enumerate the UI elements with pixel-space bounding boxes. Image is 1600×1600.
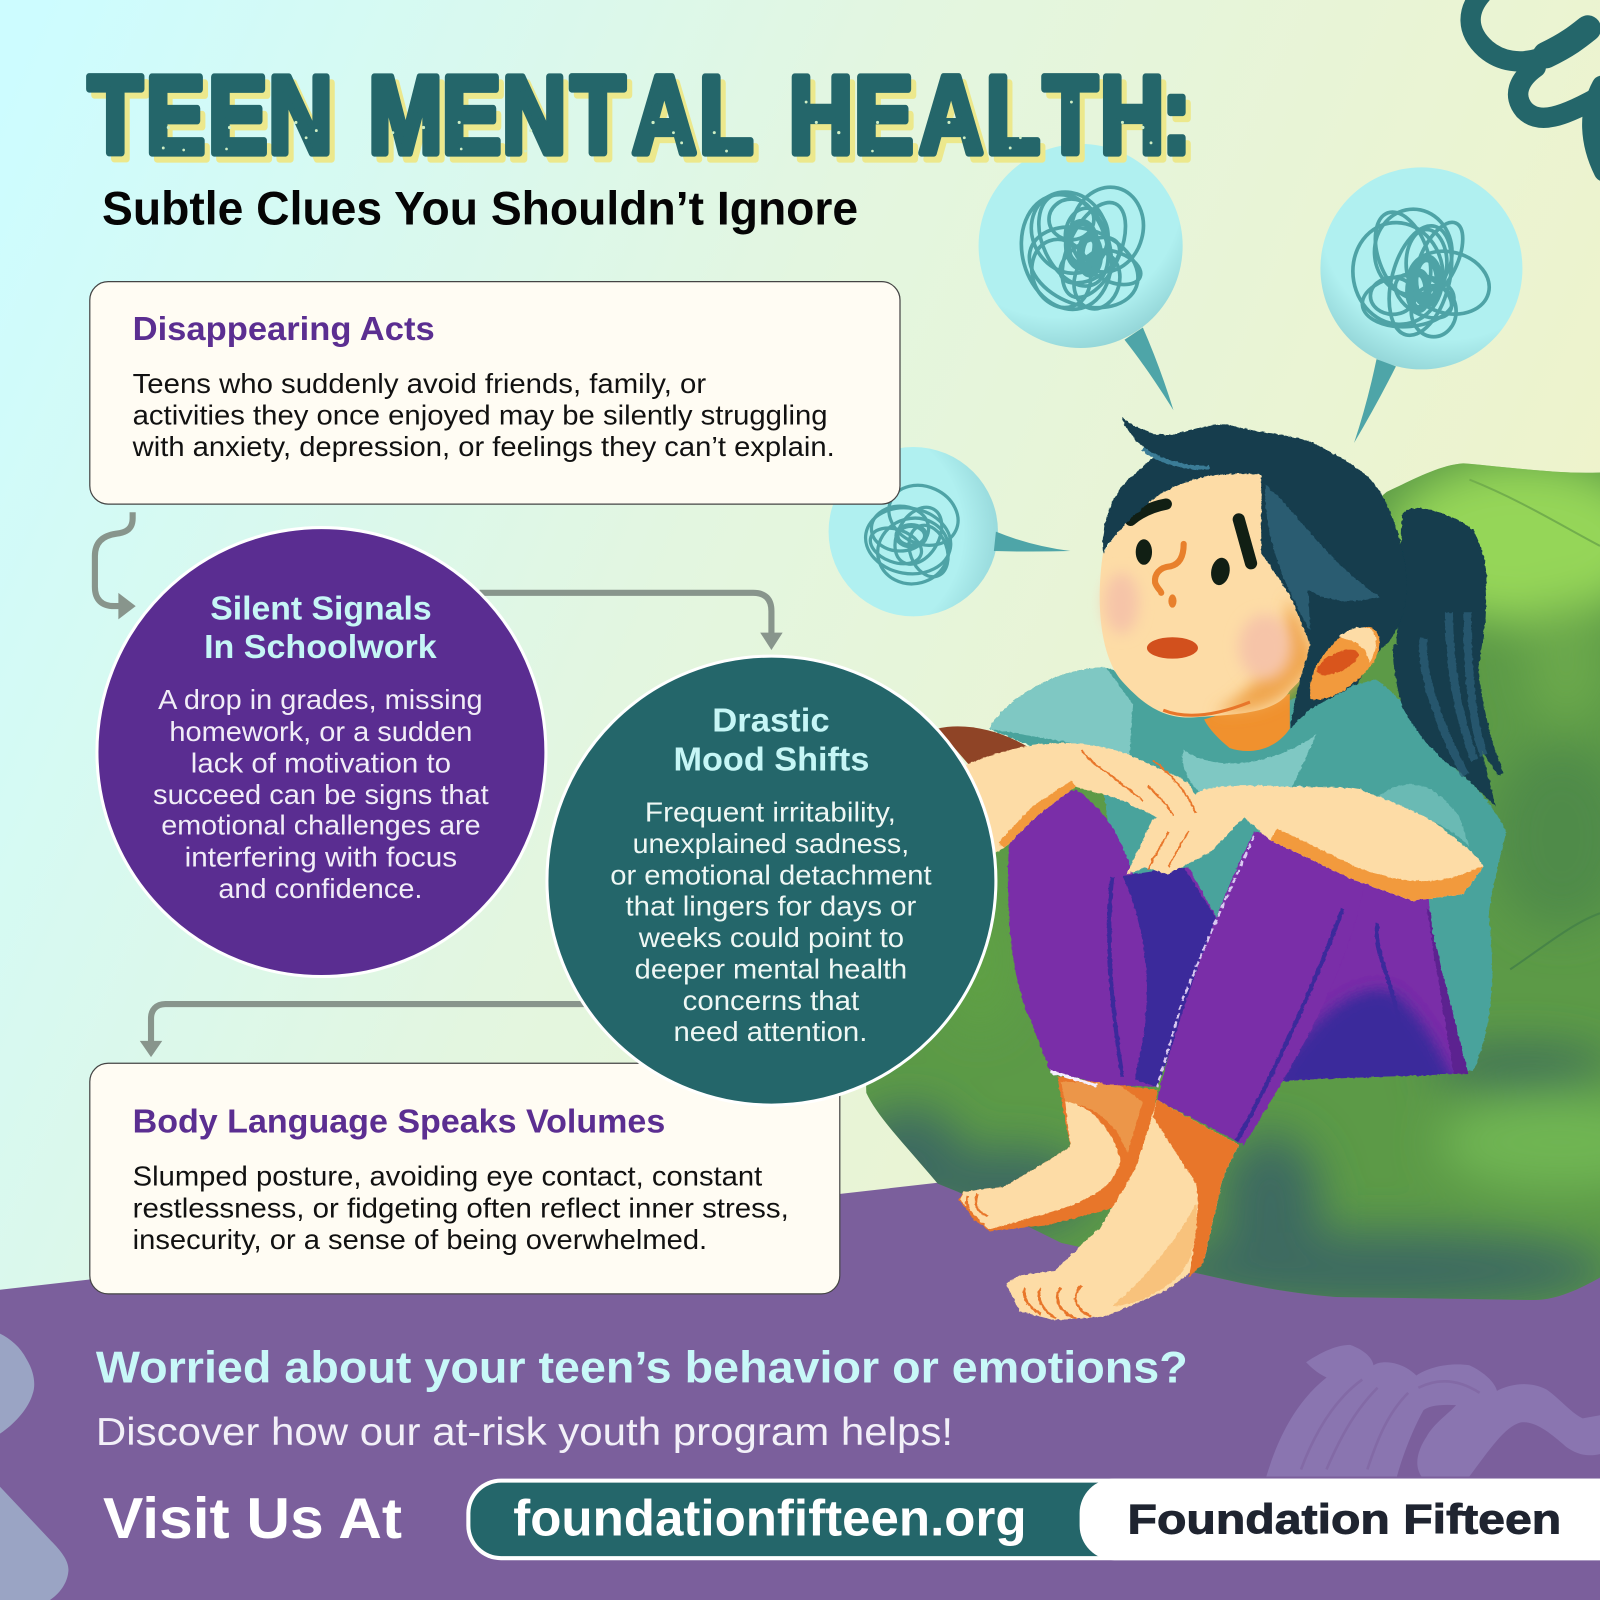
purple floor band	[0, 1107, 1600, 1600]
arms and hands	[964, 743, 1484, 901]
panel: silent signals in schoolwork: Silent Signals	[210, 590, 432, 627]
panel: silent signals in schoolwork: succeed can be signs that	[153, 779, 489, 810]
panel: body language speaks volumes: restlessness, or fidgeting often reflect inner stress,	[133, 1192, 789, 1223]
illustration: teen sitting on a bean bag	[847, 417, 1600, 1320]
title: TEEN MENTAL HEALTH:	[93, 60, 1196, 183]
brush stroke bottom left	[0, 1334, 68, 1600]
call to action heading: Worried about your teen’s behavior or emotions?	[96, 1342, 1188, 1393]
panel: drastic mood shifts: weeks could point to	[638, 922, 904, 953]
ear	[1310, 627, 1379, 700]
panel: drastic mood shifts: Mood Shifts	[673, 741, 869, 778]
panel: drastic mood shifts: Drastic	[712, 703, 830, 740]
mouth	[1147, 637, 1198, 659]
ponytail	[1393, 508, 1504, 807]
decorative squiggle top right	[1471, 0, 1600, 171]
panel: disappearing acts: activities they once enjoyed may be silently struggling	[133, 399, 828, 430]
website pill: foundationfifteen.org	[513, 1490, 1027, 1547]
bean bag	[847, 449, 1600, 1316]
panel: drastic mood shifts: deeper mental health	[635, 954, 907, 985]
brush stroke bottom right	[1266, 1345, 1600, 1477]
panel: body language speaks volumes: Slumped posture, avoiding eye contact, constant	[133, 1161, 763, 1192]
title: TEEN MENTAL HEALTH:	[88, 54, 1191, 177]
thought bubble: top left	[979, 144, 1183, 410]
panel: silent signals in schoolwork: homework, or a sudden	[169, 716, 472, 747]
panel: drastic mood shifts: need attention.	[673, 1016, 867, 1047]
panel: drastic mood shifts: concerns that	[683, 985, 860, 1016]
panel: disappearing acts: with anxiety, depression, or feelings they can’t explain.	[132, 431, 835, 462]
panel: body language speaks volumes	[90, 1063, 840, 1294]
panel: drastic mood shifts: that lingers for days or	[626, 890, 916, 921]
neck	[1204, 694, 1290, 751]
shirt	[989, 667, 1506, 1070]
panel: silent signals in schoolwork: interfering with focus	[185, 841, 457, 872]
thought bubble: top right	[1320, 167, 1522, 443]
arrow: teal circle to box four	[140, 1004, 587, 1057]
panel: drastic mood shifts: or emotional detachment	[610, 860, 932, 891]
panel: silent signals in schoolwork	[97, 528, 546, 977]
visit us label: Visit Us At	[103, 1487, 402, 1551]
panel: disappearing acts: Disappearing Acts	[133, 311, 435, 348]
panel: silent signals in schoolwork: lack of motivation to	[191, 747, 451, 778]
pants	[1008, 790, 1474, 1145]
panel: silent signals in schoolwork: and confidence.	[218, 873, 422, 904]
panel: disappearing acts: Teens who suddenly avoid friends, family, or	[133, 368, 706, 399]
panel: drastic mood shifts: Frequent irritability,	[645, 796, 896, 827]
website pill: Foundation Fifteen	[1128, 1496, 1561, 1543]
panel: body language speaks volumes: Body Language Speaks Volumes	[133, 1104, 665, 1141]
panel: disappearing acts	[90, 282, 900, 504]
panel: drastic mood shifts	[547, 656, 996, 1105]
panel: silent signals in schoolwork: In Schoolwork	[204, 629, 437, 666]
panel: body language speaks volumes: insecurity, or a sense of being overwhelmed.	[133, 1224, 707, 1255]
brown sleeve	[938, 726, 1030, 765]
panel: silent signals in schoolwork: A drop in grades, missing	[158, 684, 483, 715]
call to action text: Discover how our at-risk youth program helps!	[96, 1411, 953, 1454]
panel: silent signals in schoolwork: emotional challenges are	[161, 810, 481, 841]
arrow: purple circle to teal circle	[480, 593, 783, 650]
thought bubble: left	[829, 447, 1070, 616]
eyes and brows	[1136, 539, 1152, 565]
arrow: box one to purple circle	[95, 512, 136, 619]
face	[1100, 472, 1318, 718]
back foot	[958, 1077, 1157, 1232]
front foot	[1006, 1100, 1239, 1320]
nose	[1155, 544, 1184, 593]
panel: drastic mood shifts: unexplained sadness,	[633, 828, 909, 859]
hair	[1103, 417, 1407, 729]
website pill	[466, 1479, 1600, 1560]
subtitle: Subtle Clues You Shouldn’t Ignore	[102, 182, 858, 234]
